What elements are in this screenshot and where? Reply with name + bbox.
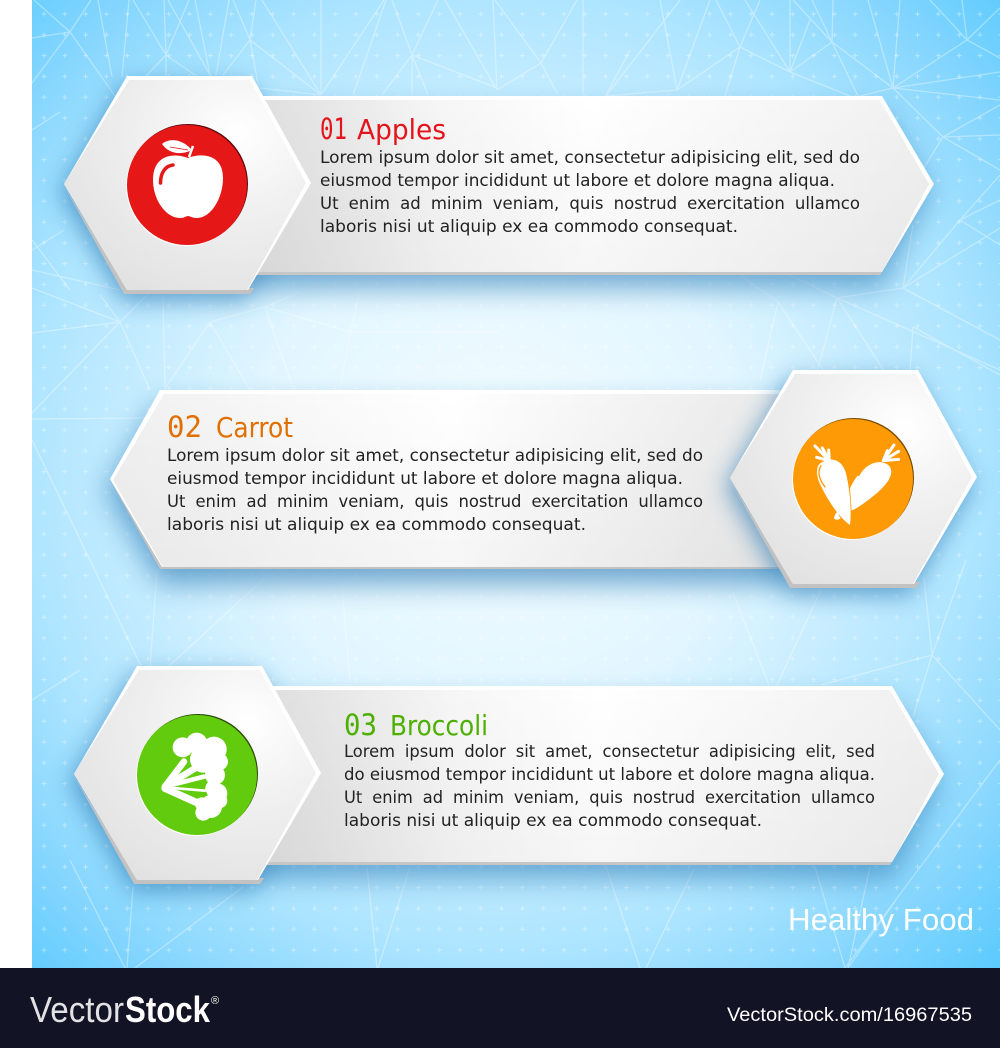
banner: carrot bbox=[106, 390, 790, 584]
text block: broccoli bbox=[344, 742, 875, 831]
panel: broccoli bbox=[70, 666, 944, 891]
text block: carrot: Ut enim ad minim veniam, quis nostrud exercitation ullamco bbox=[167, 492, 703, 512]
text block: broccoli: Ut enim ad minim veniam, quis nostrud exercitation ullamco bbox=[344, 788, 875, 808]
text block: carrot: laboris nisi ut aliquip ex ea commodo consequat. bbox=[167, 515, 586, 535]
text block: broccoli: Lorem ipsum dolor sit amet, consectetur adipisicing elit, sed bbox=[344, 742, 875, 762]
text block: carrot bbox=[167, 446, 703, 535]
hexagon: broccoli bbox=[74, 666, 321, 884]
icon: apple in red circle bbox=[126, 124, 248, 246]
text block: apples: Lorem ipsum dolor sit amet, consectetur adipisicing elit, sed do bbox=[320, 148, 860, 168]
title: 02 Carrot: 02 bbox=[167, 410, 202, 444]
banner: apples bbox=[240, 96, 934, 288]
footer id: VectorStock.com/16967535 bbox=[727, 1004, 972, 1026]
hexagon shadow: broccoli bbox=[70, 674, 317, 891]
panel: carrot bbox=[106, 370, 977, 595]
text block: broccoli: laboris nisi ut aliquip ex ea commodo consequat. bbox=[344, 811, 762, 831]
hexagon: apples bbox=[64, 76, 311, 294]
panel: apples bbox=[60, 76, 934, 301]
title: 01 Apples: 01 bbox=[320, 112, 347, 146]
text block: apples: Ut enim ad minim veniam, quis nostrud exercitation ullamco bbox=[320, 194, 860, 214]
caption: Healthy Food: Healthy Food bbox=[788, 902, 974, 937]
text block: apples: eiusmod tempor incididunt ut labore et dolore magna aliqua. bbox=[320, 171, 835, 191]
title: 01 Apples: Apples bbox=[357, 113, 446, 146]
title: 03 Broccoli: 03 bbox=[344, 708, 377, 742]
title: 02 Carrot: Carrot bbox=[216, 411, 293, 444]
icon: broccoli in green circle bbox=[136, 714, 258, 836]
footer bar bbox=[0, 968, 1000, 1048]
hexagon: carrot bbox=[730, 370, 977, 588]
title: 03 Broccoli bbox=[344, 708, 488, 742]
title: 02 Carrot bbox=[167, 410, 293, 444]
logo: VectorStock: Stock bbox=[125, 989, 211, 1030]
title: 01 Apples bbox=[320, 112, 446, 146]
logo: VectorStock: ® bbox=[211, 995, 219, 1007]
text block: carrot: Lorem ipsum dolor sit amet, consectetur adipisicing elit, sed do bbox=[167, 446, 703, 466]
title: 03 Broccoli: Broccoli bbox=[390, 709, 488, 742]
text block: apples bbox=[320, 148, 860, 237]
hexagon shadow: carrot bbox=[726, 378, 973, 595]
icon: carrots in orange circle bbox=[792, 418, 914, 540]
text block: apples: laboris nisi ut aliquip ex ea commodo consequat. bbox=[320, 217, 738, 237]
hexagon shadow: apples bbox=[60, 84, 307, 301]
logo: VectorStock bbox=[30, 989, 219, 1030]
banner: broccoli bbox=[250, 686, 944, 878]
logo: VectorStock: Vector bbox=[30, 989, 124, 1030]
text block: broccoli: do eiusmod tempor incididunt ut labore et dolore magna aliqua. bbox=[344, 765, 875, 785]
text block: carrot: eiusmod tempor incididunt ut labore et dolore magna aliqua. bbox=[167, 469, 683, 489]
left white margin bbox=[0, 0, 32, 968]
